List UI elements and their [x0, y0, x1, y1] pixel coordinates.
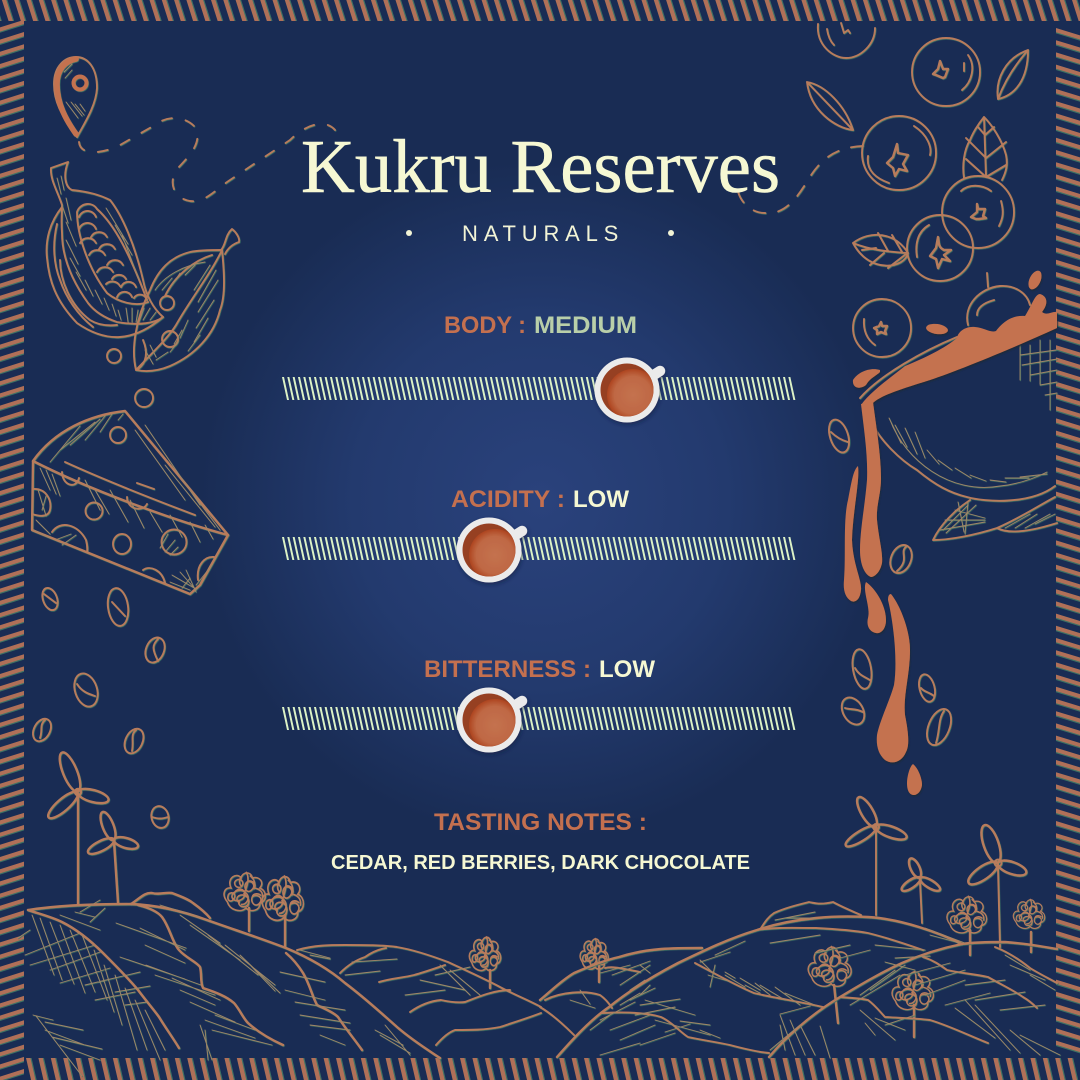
illustration: coffee beans left: [29, 586, 171, 830]
track: [285, 707, 796, 730]
illustration: location pin with dashed trail: [54, 57, 335, 201]
subtitle: naturals: NATURALS: [462, 221, 624, 246]
label: acidity low: [451, 486, 630, 513]
coffee cup marker: [456, 688, 522, 752]
tasting notes heading: TASTING NOTES :: [434, 809, 647, 836]
coffee cup marker: [456, 518, 522, 582]
illustration: right trees: [580, 896, 1045, 1037]
slider: acidity: [285, 486, 796, 582]
label: bitterness low: BITTERNESS :: [424, 656, 591, 683]
subtitle: naturals: [406, 221, 674, 246]
label: acidity low: LOW: [573, 486, 630, 513]
illustration: sauce splash and drips: [844, 269, 1057, 795]
illustration: cheese wedge: [32, 411, 228, 594]
slider: body: [285, 312, 796, 422]
label: bitterness low: LOW: [599, 656, 656, 683]
illustration: left hills: [18, 893, 541, 1076]
slider: bitterness: [285, 656, 796, 752]
coffee cup marker: [594, 358, 660, 422]
illustration: right wind turbines: [843, 794, 1028, 947]
track: [285, 537, 796, 560]
central glow: [200, 160, 880, 840]
label: body medium: BODY :: [444, 312, 526, 339]
illustration: left trees: [224, 872, 501, 988]
label: acidity low: ACIDITY :: [451, 486, 565, 513]
illustration: blueberries and leaves: [737, 23, 1028, 357]
illustration: right hills: [540, 902, 1060, 1058]
title: Kukru Reserves: [301, 125, 780, 209]
illustration: coffee beans right: [825, 417, 956, 749]
label: body medium: MEDIUM: [534, 312, 637, 339]
label: body medium: [444, 312, 637, 339]
track: [285, 377, 796, 400]
illustration: left wind turbines: [45, 750, 139, 905]
illustration: overturned bowl and sauce: [860, 273, 1057, 540]
tasting notes list: CEDAR, RED BERRIES, DARK CHOCOLATE: [331, 851, 750, 874]
illustration: cacao pods: [47, 162, 239, 407]
